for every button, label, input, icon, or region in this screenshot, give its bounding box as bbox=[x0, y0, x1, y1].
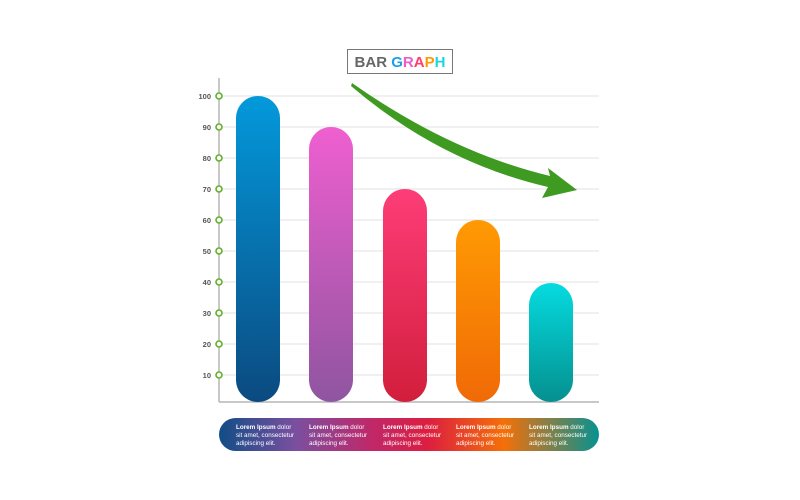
y axis labels: 30 bbox=[203, 309, 211, 318]
y axis labels: 10 bbox=[203, 371, 211, 380]
y axis labels: 70 bbox=[203, 185, 211, 194]
legend bar: Lorem Ipsum dolor bbox=[309, 424, 364, 431]
y axis labels: 90 bbox=[203, 123, 211, 132]
legend bar: adipiscing elit. bbox=[383, 440, 423, 447]
legend bar: sit amet, consectetur bbox=[236, 432, 294, 439]
y axis labels: 100 bbox=[198, 92, 211, 101]
legend bar: Lorem Ipsum dolor bbox=[383, 424, 438, 431]
axes bbox=[219, 78, 599, 402]
legend bar: sit amet, consectetur bbox=[383, 432, 441, 439]
title: BAR GRAPH bbox=[355, 54, 445, 71]
arrow bbox=[351, 83, 577, 198]
legend bar: adipiscing elit. bbox=[529, 440, 569, 447]
legend bar: sit amet, consectetur bbox=[456, 432, 514, 439]
legend bar: adipiscing elit. bbox=[236, 440, 276, 447]
legend bar: sit amet, consectetur bbox=[529, 432, 587, 439]
legend bar bbox=[219, 418, 599, 451]
legend bar: adipiscing elit. bbox=[309, 440, 349, 447]
y axis labels: 50 bbox=[203, 247, 211, 256]
y axis labels: 80 bbox=[203, 154, 211, 163]
legend bar: Lorem Ipsum dolor bbox=[456, 424, 511, 431]
legend bar: adipiscing elit. bbox=[456, 440, 496, 447]
y axis labels bbox=[198, 92, 211, 380]
y axis labels: 40 bbox=[203, 278, 211, 287]
legend bar: Lorem Ipsum dolor bbox=[236, 424, 291, 431]
bars bbox=[236, 96, 573, 402]
legend bar: Lorem Ipsum dolor bbox=[529, 424, 584, 431]
legend bar: sit amet, consectetur bbox=[309, 432, 367, 439]
y axis labels: 20 bbox=[203, 340, 211, 349]
y axis labels: 60 bbox=[203, 216, 211, 225]
title bbox=[348, 50, 452, 74]
